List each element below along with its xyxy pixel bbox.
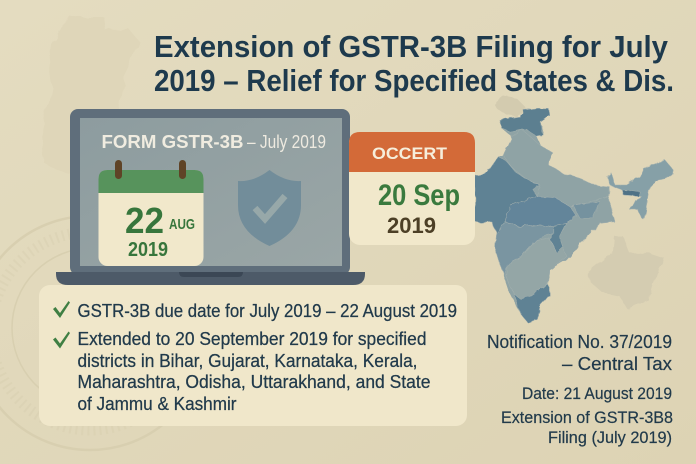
- map: Rajasthan and Gujarat: [475, 157, 540, 233]
- card: extended date: OCCERT: [372, 145, 447, 163]
- map: eastern coast: [548, 197, 615, 270]
- map: Maharashtra: [495, 222, 553, 273]
- point two: [78, 328, 430, 414]
- map: silhouette base: [475, 108, 615, 323]
- notification details: [487, 332, 673, 447]
- laptop: lid: [70, 109, 350, 275]
- laptop: screen: [80, 118, 342, 266]
- point two: Maharashtra, Odisha, Uttarakhand, and State: [78, 371, 430, 392]
- card: extended date: [349, 132, 475, 245]
- notification details: – Central Tax: [562, 354, 672, 374]
- card: extended date: 2019: [387, 213, 436, 238]
- point one: GSTR-3B due date for July 2019 – 22 August 2019: [78, 300, 457, 321]
- watermark: circular seal: [0, 216, 207, 450]
- map of India: [475, 96, 673, 323]
- watermark: national emblem: [43, 18, 140, 175]
- screen heading: – July 2019: [247, 132, 326, 152]
- map: central India: [505, 197, 577, 227]
- map: northern plains: [503, 129, 609, 207]
- laptop: [56, 109, 365, 285]
- notification details: Notification No. 37/2019: [487, 332, 672, 352]
- notification details: Filing (July 2019): [548, 429, 672, 447]
- map: north-east: [607, 160, 673, 218]
- icon: check one: [53, 301, 70, 318]
- calendar: 22 Aug 2019: AUG: [169, 216, 195, 233]
- map: ghost inset: [587, 237, 665, 308]
- icon: shield with check: [238, 170, 301, 246]
- screen heading: FORM GSTR-3B: [102, 131, 244, 152]
- point two: districts in Bihar, Gujarat, Karnataka, Kerala,: [78, 350, 418, 371]
- laptop: notch: [179, 272, 243, 277]
- map: Tamil Nadu: [513, 285, 549, 323]
- calendar: 22 Aug 2019: 22: [125, 200, 164, 241]
- map: northern ghost region: [493, 96, 527, 117]
- point two: of Jammu & Kashmir: [78, 393, 236, 414]
- notification details: Extension of GSTR-3B8: [501, 409, 673, 427]
- map: Meghalaya: [622, 189, 640, 196]
- map: Jharkhand: [573, 202, 600, 218]
- calendar: 22 Aug 2019: 2019: [128, 239, 168, 261]
- calendar: 22 Aug 2019: [98, 160, 204, 266]
- laptop: base: [56, 272, 365, 285]
- title: [154, 30, 674, 98]
- screen heading: [102, 131, 326, 152]
- map: Jammu and Kashmir: [499, 108, 549, 137]
- notification details: Date: 21 August 2019: [522, 385, 672, 403]
- card: extended date: 20 Sep: [378, 179, 460, 212]
- icon: check two: [53, 332, 70, 348]
- map: Chhattisgarh: [550, 223, 567, 253]
- map: southern plateau: [506, 240, 567, 300]
- panel: key points: [39, 285, 467, 426]
- point two: Extended to 20 September 2019 for specified: [78, 328, 426, 349]
- title: Extension of GSTR-3B Filing for July: [154, 30, 668, 64]
